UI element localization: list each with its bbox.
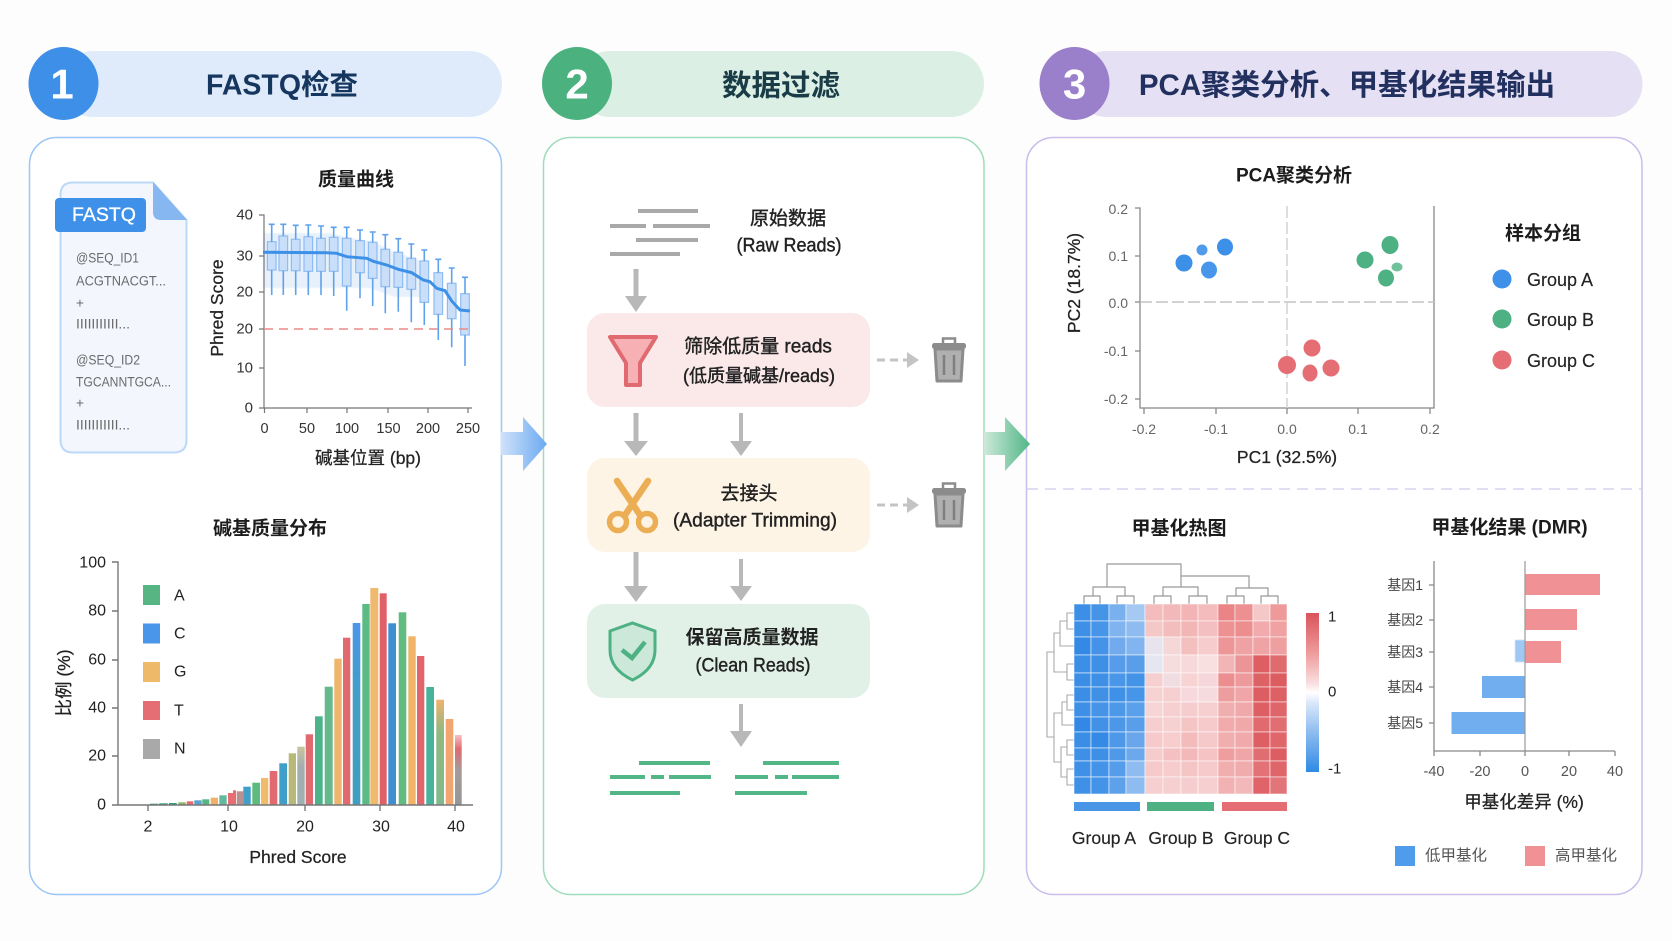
chart: methylation heatmap: -1 [1328,760,1341,778]
chart: methylation heatmap [1047,564,1341,848]
arrow: step 1 to step 2 [501,417,547,471]
chart: base quality histogram: 2 [144,818,153,836]
chart: PCA scatter: -0.1 [1204,421,1228,437]
chart: base quality histogram: 0 [97,796,106,814]
icon: FASTQ file document: IIIIIIIIIII... [76,316,130,332]
chart: base quality histogram: 比例 (%) [54,649,74,717]
legend: methylation direction: 高甲基化 [1555,846,1617,864]
chart: per-base quality boxplot: 20 [236,320,253,338]
chart: per-base quality boxplot: 0 [245,400,253,416]
panel: PCA and methylation [1026,138,1642,894]
chart: per-base quality boxplot: 20 [236,284,253,300]
chart: base quality histogram: N [174,740,186,758]
icon: clean reads lines [610,763,839,793]
arrow: trimming to clean left [624,552,648,602]
chart: DMR diverging bars: -40 [1424,764,1444,780]
header: step 2 data filtering: 数据过滤 [722,70,840,102]
chart: DMR diverging bars: 基因1 [1387,577,1423,593]
chart: per-base quality boxplot: 50 [299,421,315,437]
box: filter low-quality reads: 筛除低质量 reads [684,336,832,358]
text: raw reads [736,208,842,256]
header: step 1 FASTQ: 1 [50,60,74,108]
legend: sample groups: 样本分组 [1505,222,1581,244]
arrow: dashed to trash 1 [877,352,919,368]
header: step 1 FASTQ [28,47,502,120]
chart: base quality histogram: 20 [296,818,314,836]
chart: base quality histogram: G [174,664,186,680]
chart: PCA scatter: 0.0 [1277,421,1297,437]
chart: PCA scatter: PC1 (32.5%) [1237,447,1337,467]
icon: FASTQ file document: + [76,396,84,410]
heading: methylation heatmap: 甲基化热图 [1131,518,1227,540]
arrow: filter to trimming right [730,413,752,456]
chart: per-base quality boxplot: 40 [236,206,253,224]
chart: DMR diverging bars: -20 [1470,764,1490,780]
heading: PCA: PCA聚类分析 [1236,164,1352,186]
chart: per-base quality boxplot: 250 [456,421,480,437]
chart: per-base quality boxplot: 100 [335,421,359,437]
chart: base quality histogram: 60 [88,652,106,668]
box: filter low-quality reads: (低质量碱基/reads) [683,366,835,386]
box: filter low-quality reads [587,313,870,407]
chart: PCA scatter: 0.0 [1109,295,1128,311]
chart: base quality histogram [54,554,473,867]
icon: FASTQ file document: FASTQ [72,204,136,226]
legend: sample groups: Group A [1527,270,1593,290]
arrow: step 2 to step 3 [984,417,1030,471]
icon: FASTQ file document: IIIIIIIIIII... [76,418,130,432]
arrow: raw reads to filter [625,269,647,312]
chart: DMR diverging bars: 基因3 [1387,644,1423,660]
chart: base quality histogram: 40 [447,818,465,836]
legend: sample groups: Group C [1527,351,1595,371]
icon: funnel [610,337,656,385]
chart: methylation heatmap: Group B [1148,828,1214,848]
arrow: dashed to trash 2 [877,497,919,513]
icon: shield check [610,623,655,680]
box: keep clean reads: (Clean Reads) [696,656,810,676]
chart: methylation heatmap: Group C [1224,828,1290,848]
panel: FASTQ inspection [30,138,502,894]
header: step 3 PCA and methylation: PCA聚类分析、甲基化结果输出 [1139,69,1555,102]
icon: raw reads lines [610,211,710,254]
header: step 2 data filtering: 2 [565,60,589,108]
arrow: filter to trimming left [624,413,648,456]
icon: trash 1 [932,338,966,381]
chart: PCA scatter: 0.1 [1109,248,1128,264]
arrow: trimming to clean right [730,559,752,601]
icon: trash 2 [932,484,966,526]
chart: DMR diverging bars: 基因2 [1387,612,1423,628]
legend: sample groups: Group B [1527,310,1594,330]
chart: base quality histogram: Phred Score [249,847,347,867]
legend: sample groups [1492,222,1595,371]
chart: PCA scatter [1064,201,1440,467]
heading: DMR results: 甲基化结果 (DMR) [1431,516,1588,538]
chart: DMR diverging bars [1387,561,1623,812]
header: step 1 FASTQ: FASTQ检查 [206,70,358,102]
icon: scissors [610,481,656,530]
chart: DMR diverging bars: 40 [1607,764,1623,780]
chart: DMR diverging bars: 基因4 [1387,679,1423,695]
chart: PCA scatter: 0.1 [1348,421,1368,437]
chart: per-base quality boxplot: 30 [236,248,253,264]
chart: base quality histogram: 80 [88,602,106,620]
chart: base quality histogram: 10 [220,818,238,836]
chart: base quality histogram: T [174,702,184,720]
chart: per-base quality boxplot: Phred Score [207,259,227,357]
text: raw reads: (Raw Reads) [736,236,842,256]
chart: per-base quality boxplot [207,206,480,468]
chart: per-base quality boxplot: 0 [260,421,269,437]
chart: per-base quality boxplot: 碱基位置 (bp) [315,448,421,468]
legend: methylation direction: 低甲基化 [1425,846,1487,864]
box: keep clean reads [587,604,870,698]
panel: data filtering [544,138,984,894]
chart: base quality histogram: 30 [372,818,390,836]
chart: DMR diverging bars: 基因5 [1387,715,1423,731]
heading: base quality distribution: 碱基质量分布 [213,516,327,540]
chart: DMR diverging bars: 20 [1561,764,1577,780]
chart: PCA scatter: -0.2 [1132,421,1156,437]
chart: PCA scatter: -0.2 [1104,391,1128,407]
heading: quality curve: 质量曲线 [318,168,394,190]
chart: per-base quality boxplot: 150 [376,421,401,437]
header: step 2 data filtering [542,47,984,120]
chart: methylation heatmap: 1 [1328,608,1336,626]
icon: FASTQ file document [55,182,187,452]
chart: base quality histogram: C [174,626,186,642]
chart: base quality histogram: 100 [79,554,106,572]
box: adapter trimming: 去接头 [720,482,778,504]
text: raw reads: 原始数据 [750,208,826,230]
chart: PCA scatter: PC2 (18.7%) [1064,233,1084,333]
chart: PCA scatter: 0.2 [1109,201,1128,217]
header: step 3 PCA and methylation [1040,47,1642,120]
chart: base quality histogram: A [174,588,185,604]
chart: per-base quality boxplot: 10 [236,360,253,376]
chart: methylation heatmap: Group A [1072,828,1136,848]
box: adapter trimming [587,458,870,552]
icon: FASTQ file document: @SEQ_ID2 [76,352,140,368]
arrow: clean box to clean reads [730,704,752,747]
chart: methylation heatmap: 0 [1328,684,1336,700]
chart: PCA scatter: -0.1 [1104,343,1128,359]
chart: DMR diverging bars: 0 [1521,764,1529,780]
chart: base quality histogram: 40 [88,700,106,716]
chart: DMR diverging bars: 甲基化差异 (%) [1464,792,1584,812]
icon: FASTQ file document: ACGTNACGT... [76,274,166,288]
icon: FASTQ file document: @SEQ_ID1 [76,250,139,266]
chart: base quality histogram: 20 [88,748,106,764]
icon: FASTQ file document: TGCANNTGCA... [76,374,171,390]
chart: per-base quality boxplot: 200 [416,421,440,437]
legend: methylation direction [1395,846,1617,866]
box: adapter trimming: (Adapter Trimming) [673,510,837,532]
chart: PCA scatter: 0.2 [1420,421,1440,437]
box: keep clean reads: 保留高质量数据 [685,626,819,648]
icon: FASTQ file document: + [76,296,84,310]
header: step 3 PCA and methylation: 3 [1063,60,1086,108]
